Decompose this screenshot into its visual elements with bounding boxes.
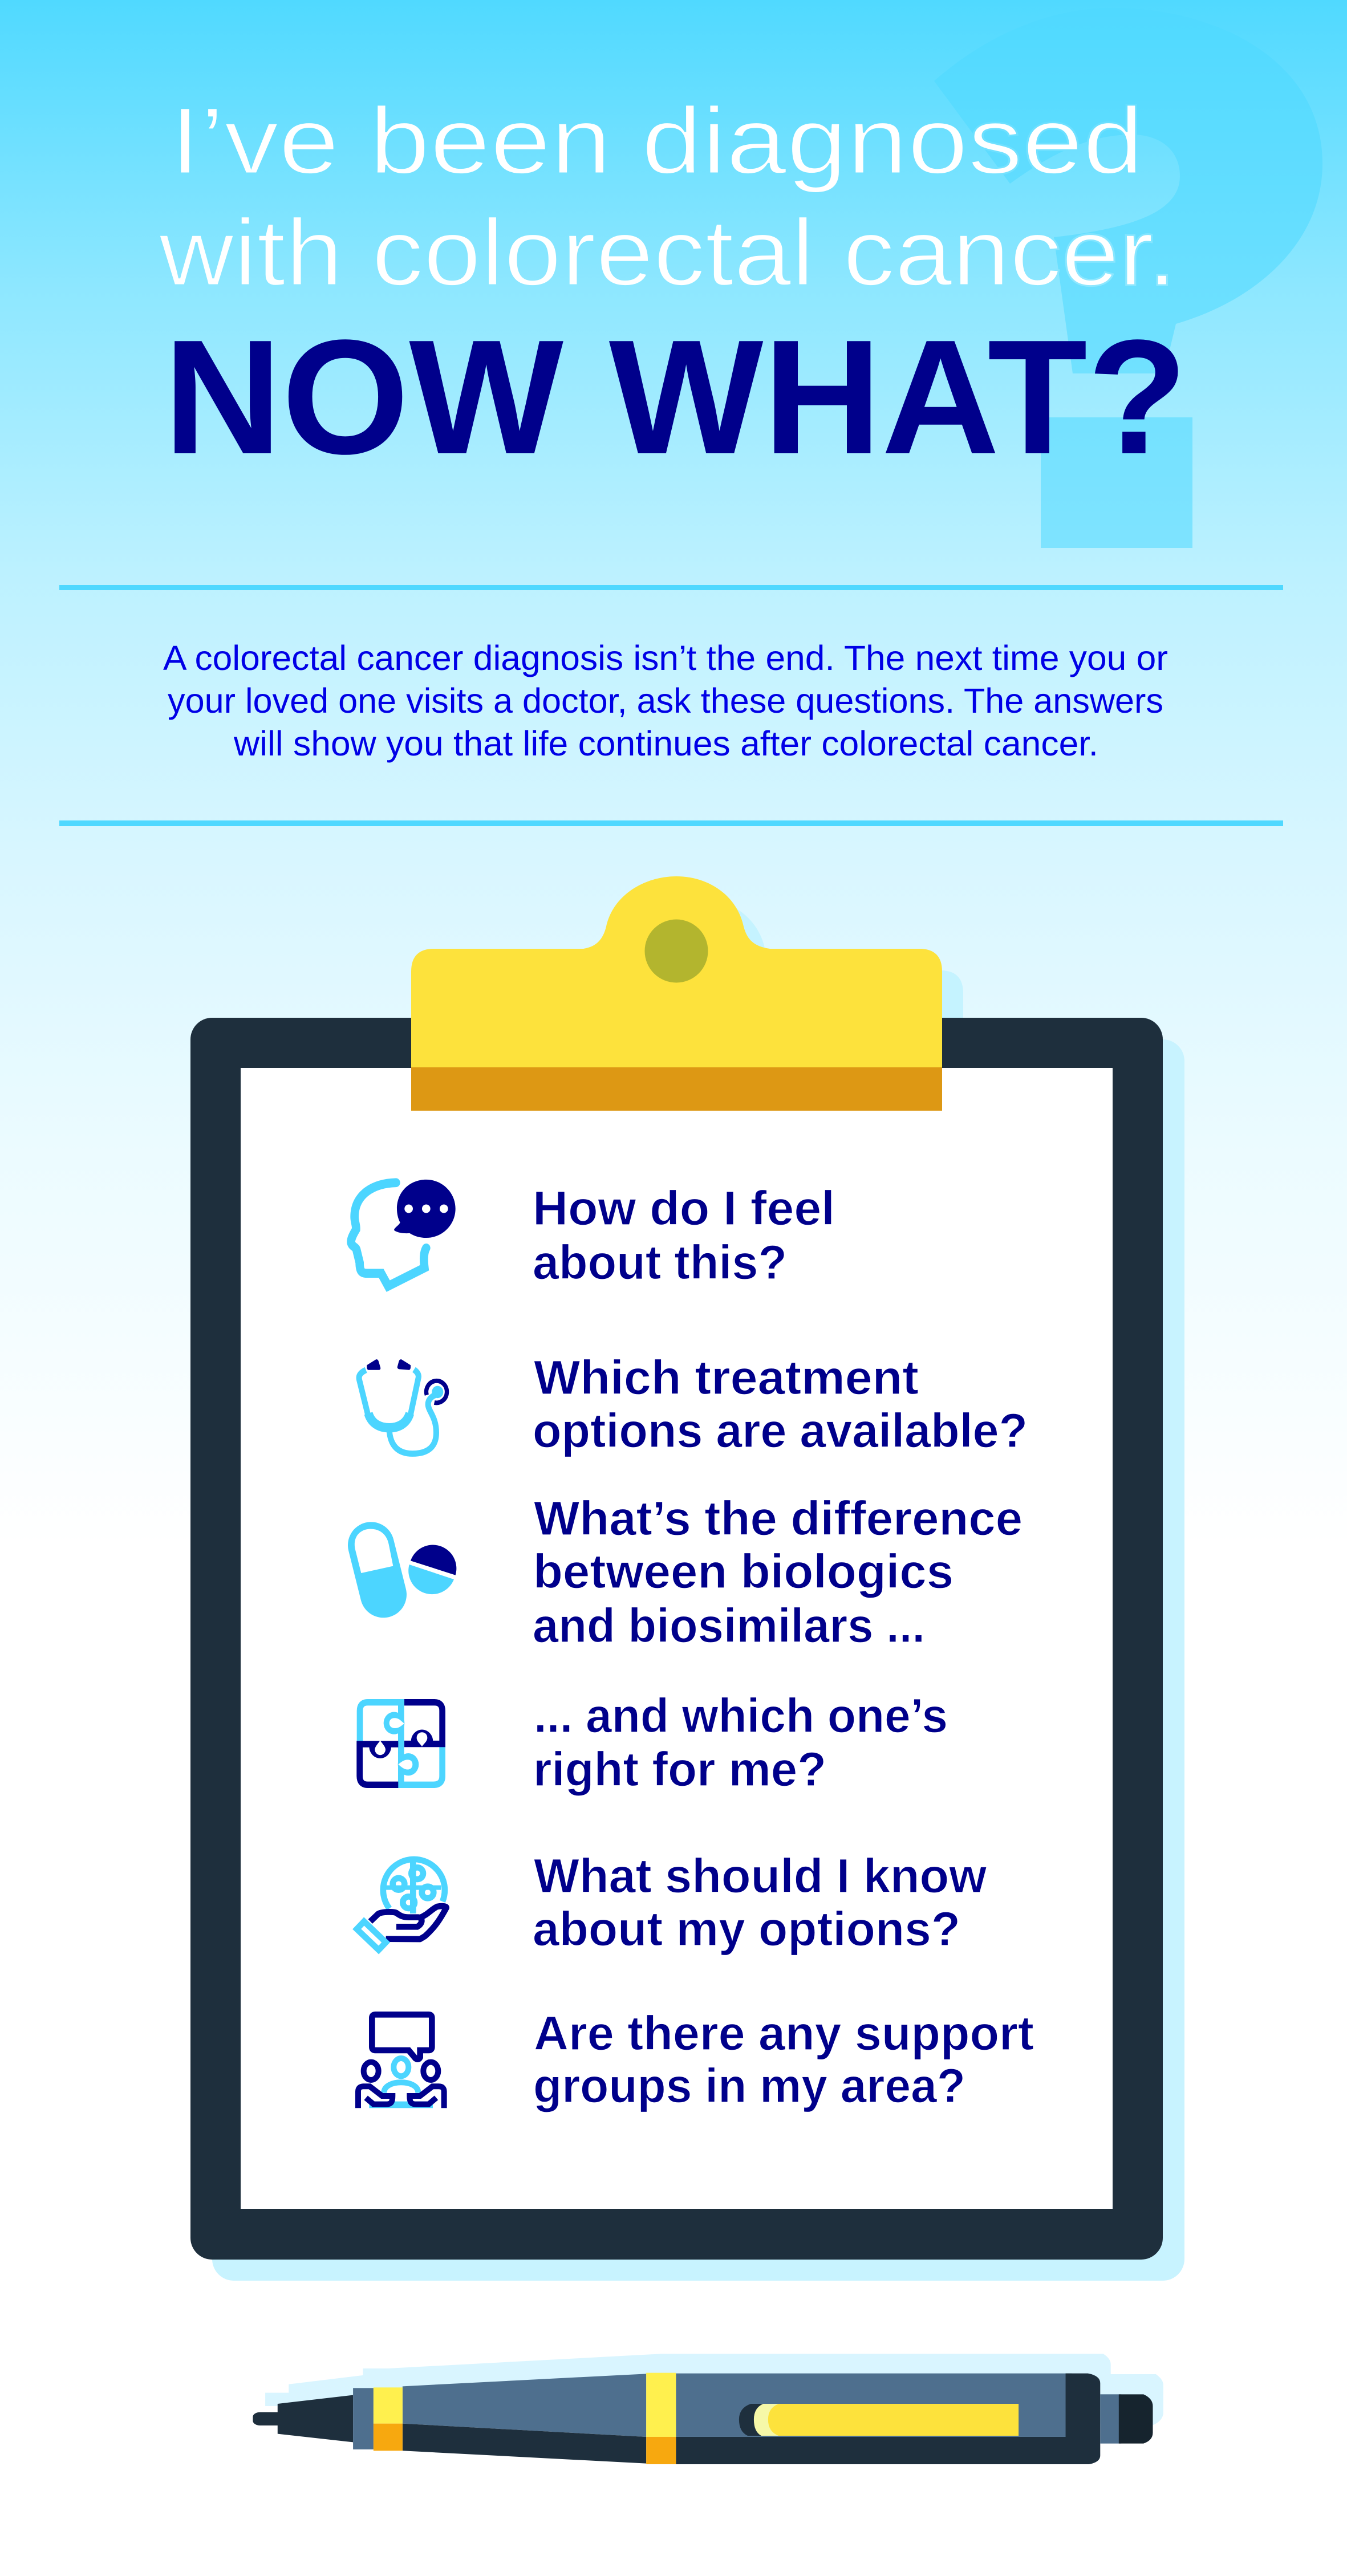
- pen tapered barrel: [403, 2374, 646, 2437]
- clip shadow: [432, 898, 963, 1089]
- icon: hand holding puzzle globe: [357, 1857, 447, 1950]
- pen: [253, 2354, 1163, 2464]
- intro paragraph: your loved one visits a doctor, ask these questions. The answers: [168, 681, 1163, 720]
- clipboard: [190, 876, 1184, 2281]
- pen tip: [253, 2412, 290, 2425]
- clip lower band: [411, 1067, 942, 1111]
- question: which one is right: ... and which one’s: [534, 1689, 948, 1742]
- clip yellow: [411, 876, 942, 1067]
- icon: capsule and tablet: [355, 1529, 456, 1595]
- clipboard shadow: [212, 1039, 1184, 2281]
- clip hole: [644, 919, 708, 983]
- question: how do I feel: [533, 1181, 835, 1289]
- icon: stethoscope: [359, 1359, 447, 1454]
- intro paragraph: [163, 639, 1168, 763]
- paper: [241, 1068, 1113, 2209]
- pen main barrel: [676, 2374, 1072, 2437]
- title: [159, 88, 1187, 488]
- divider top: [59, 585, 1283, 590]
- question: biologics and biosimilars: and biosimilars ...: [533, 1599, 925, 1652]
- pen clip: [739, 2404, 1019, 2436]
- intro paragraph: A colorectal cancer diagnosis isn’t the end. The next time you or: [163, 639, 1168, 677]
- question: which one is right: right for me?: [533, 1742, 826, 1796]
- icon: support group: [358, 2014, 444, 2108]
- pen end cap: [1100, 2394, 1153, 2444]
- question: support groups: [533, 2006, 1034, 2112]
- question: biologics and biosimilars: between biologics: [533, 1545, 954, 1598]
- question: how do I feel: about this?: [533, 1236, 787, 1289]
- intro paragraph: will show you that life continues after colorectal cancer.: [233, 724, 1098, 763]
- question: support groups: groups in my area?: [533, 2059, 965, 2112]
- pen band middle: [646, 2373, 676, 2464]
- question: treatment options: [533, 1351, 1028, 1457]
- question: support groups: Are there any support: [534, 2006, 1034, 2060]
- clipboard board: [190, 1018, 1163, 2260]
- pen band front: [374, 2387, 403, 2451]
- question: what should I know: about my options?: [533, 1902, 960, 1956]
- question: biologics and biosimilars: What’s the difference: [534, 1492, 1023, 1545]
- divider bottom: [59, 820, 1283, 826]
- title: NOW WHAT?: [164, 306, 1187, 488]
- question: how do I feel: How do I feel: [533, 1181, 835, 1235]
- question: treatment options: Which treatment: [534, 1351, 919, 1404]
- icon: large background question mark: [934, 8, 1322, 548]
- question: biologics and biosimilars: [533, 1492, 1023, 1652]
- question: treatment options: options are available?: [533, 1404, 1028, 1457]
- pen collar: [353, 2388, 374, 2449]
- pen shadow: [265, 2354, 1163, 2425]
- question: what should I know: [533, 1849, 987, 1956]
- title: with colorectal cancer.: [159, 200, 1176, 306]
- title: I’ve been diagnosed: [170, 88, 1143, 194]
- icon: puzzle pieces: [360, 1703, 443, 1785]
- question: what should I know: What should I know: [534, 1849, 987, 1903]
- question: which one is right: [533, 1689, 948, 1796]
- icon: head with speech bubble: [351, 1180, 456, 1286]
